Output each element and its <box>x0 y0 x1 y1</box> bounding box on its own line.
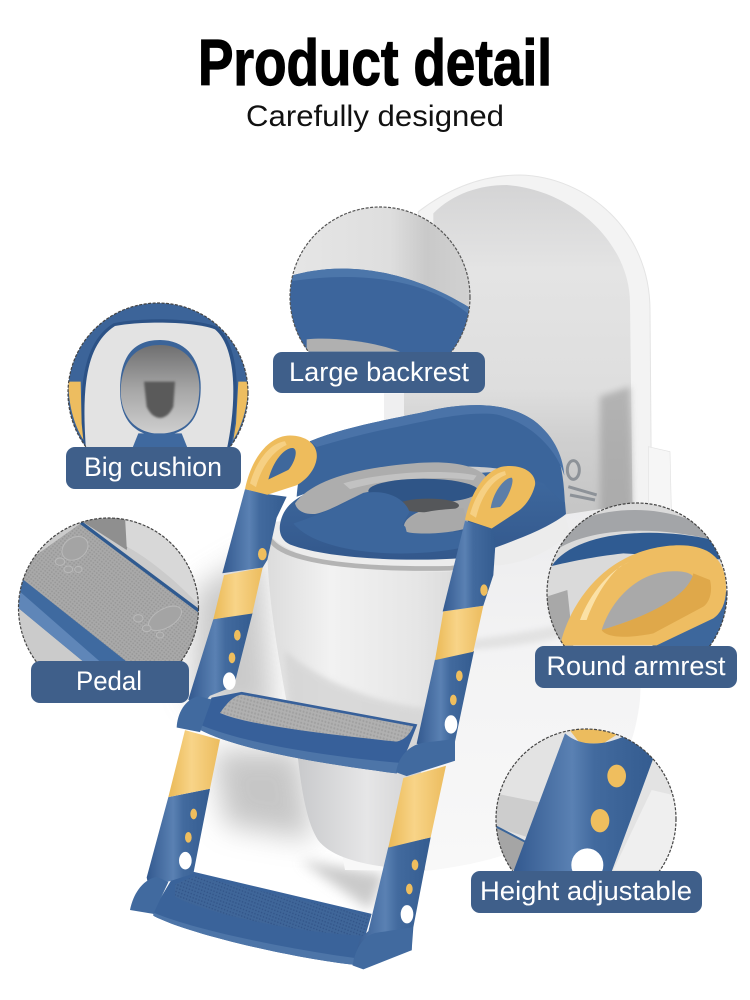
left leg, lower yellow <box>168 730 220 797</box>
right leg, lower blue <box>353 837 431 966</box>
right leg dots <box>401 584 488 923</box>
toilet lid <box>384 175 672 523</box>
middle step <box>198 692 417 773</box>
backrest <box>297 405 565 504</box>
left leg, lower blue <box>147 789 210 893</box>
right foot <box>353 927 412 969</box>
label: round armrest <box>535 646 737 688</box>
footprints <box>55 532 186 638</box>
detail circle: round armrest <box>546 502 728 646</box>
bottom step <box>153 872 372 965</box>
detail circle: big cushion <box>67 302 249 447</box>
left joint <box>177 696 212 732</box>
tank <box>648 447 672 523</box>
right leg, upper yellow <box>435 606 483 660</box>
label: height adjustable <box>471 871 702 913</box>
potty front <box>293 492 463 554</box>
floor shadows <box>190 550 385 910</box>
label: big cushion: Big cushion <box>84 452 222 482</box>
detail circle: pedal <box>18 517 200 662</box>
ladder <box>130 435 535 969</box>
label: round armrest: Round armrest <box>546 651 726 681</box>
right joint <box>396 739 455 776</box>
left leg, upper blue <box>222 489 287 573</box>
bowl upper <box>267 535 480 760</box>
right leg, upper blue <box>443 521 496 612</box>
left leg, upper yellow <box>213 568 263 619</box>
subtitle: Carefully designed <box>246 100 504 133</box>
right leg, middle blue <box>417 651 474 749</box>
label: height adjustable: Height adjustable <box>480 876 692 906</box>
right handle <box>465 466 535 528</box>
label: pedal <box>31 661 189 703</box>
detail circle: height adjustable <box>495 728 677 871</box>
cushion <box>295 462 487 533</box>
hinge <box>567 461 597 500</box>
pedestal <box>296 740 425 870</box>
seat base <box>280 468 566 560</box>
label: big cushion <box>66 447 241 489</box>
toilet backdrop <box>190 175 672 910</box>
detail circle: large backrest <box>289 206 471 352</box>
seat hole <box>368 479 478 503</box>
title: Product detail <box>198 26 552 99</box>
left foot <box>130 877 168 914</box>
big base of the toilet <box>300 505 641 871</box>
potty seat <box>268 405 570 571</box>
label: large backrest: Large backrest <box>289 357 469 387</box>
left leg dots <box>179 548 267 869</box>
label: large backrest <box>273 352 485 393</box>
label: pedal: Pedal <box>76 666 142 696</box>
left leg, middle blue <box>188 613 253 709</box>
lid left block <box>384 393 404 420</box>
right leg, lower yellow <box>388 766 446 848</box>
left handle <box>245 435 317 495</box>
white rim <box>268 510 570 571</box>
